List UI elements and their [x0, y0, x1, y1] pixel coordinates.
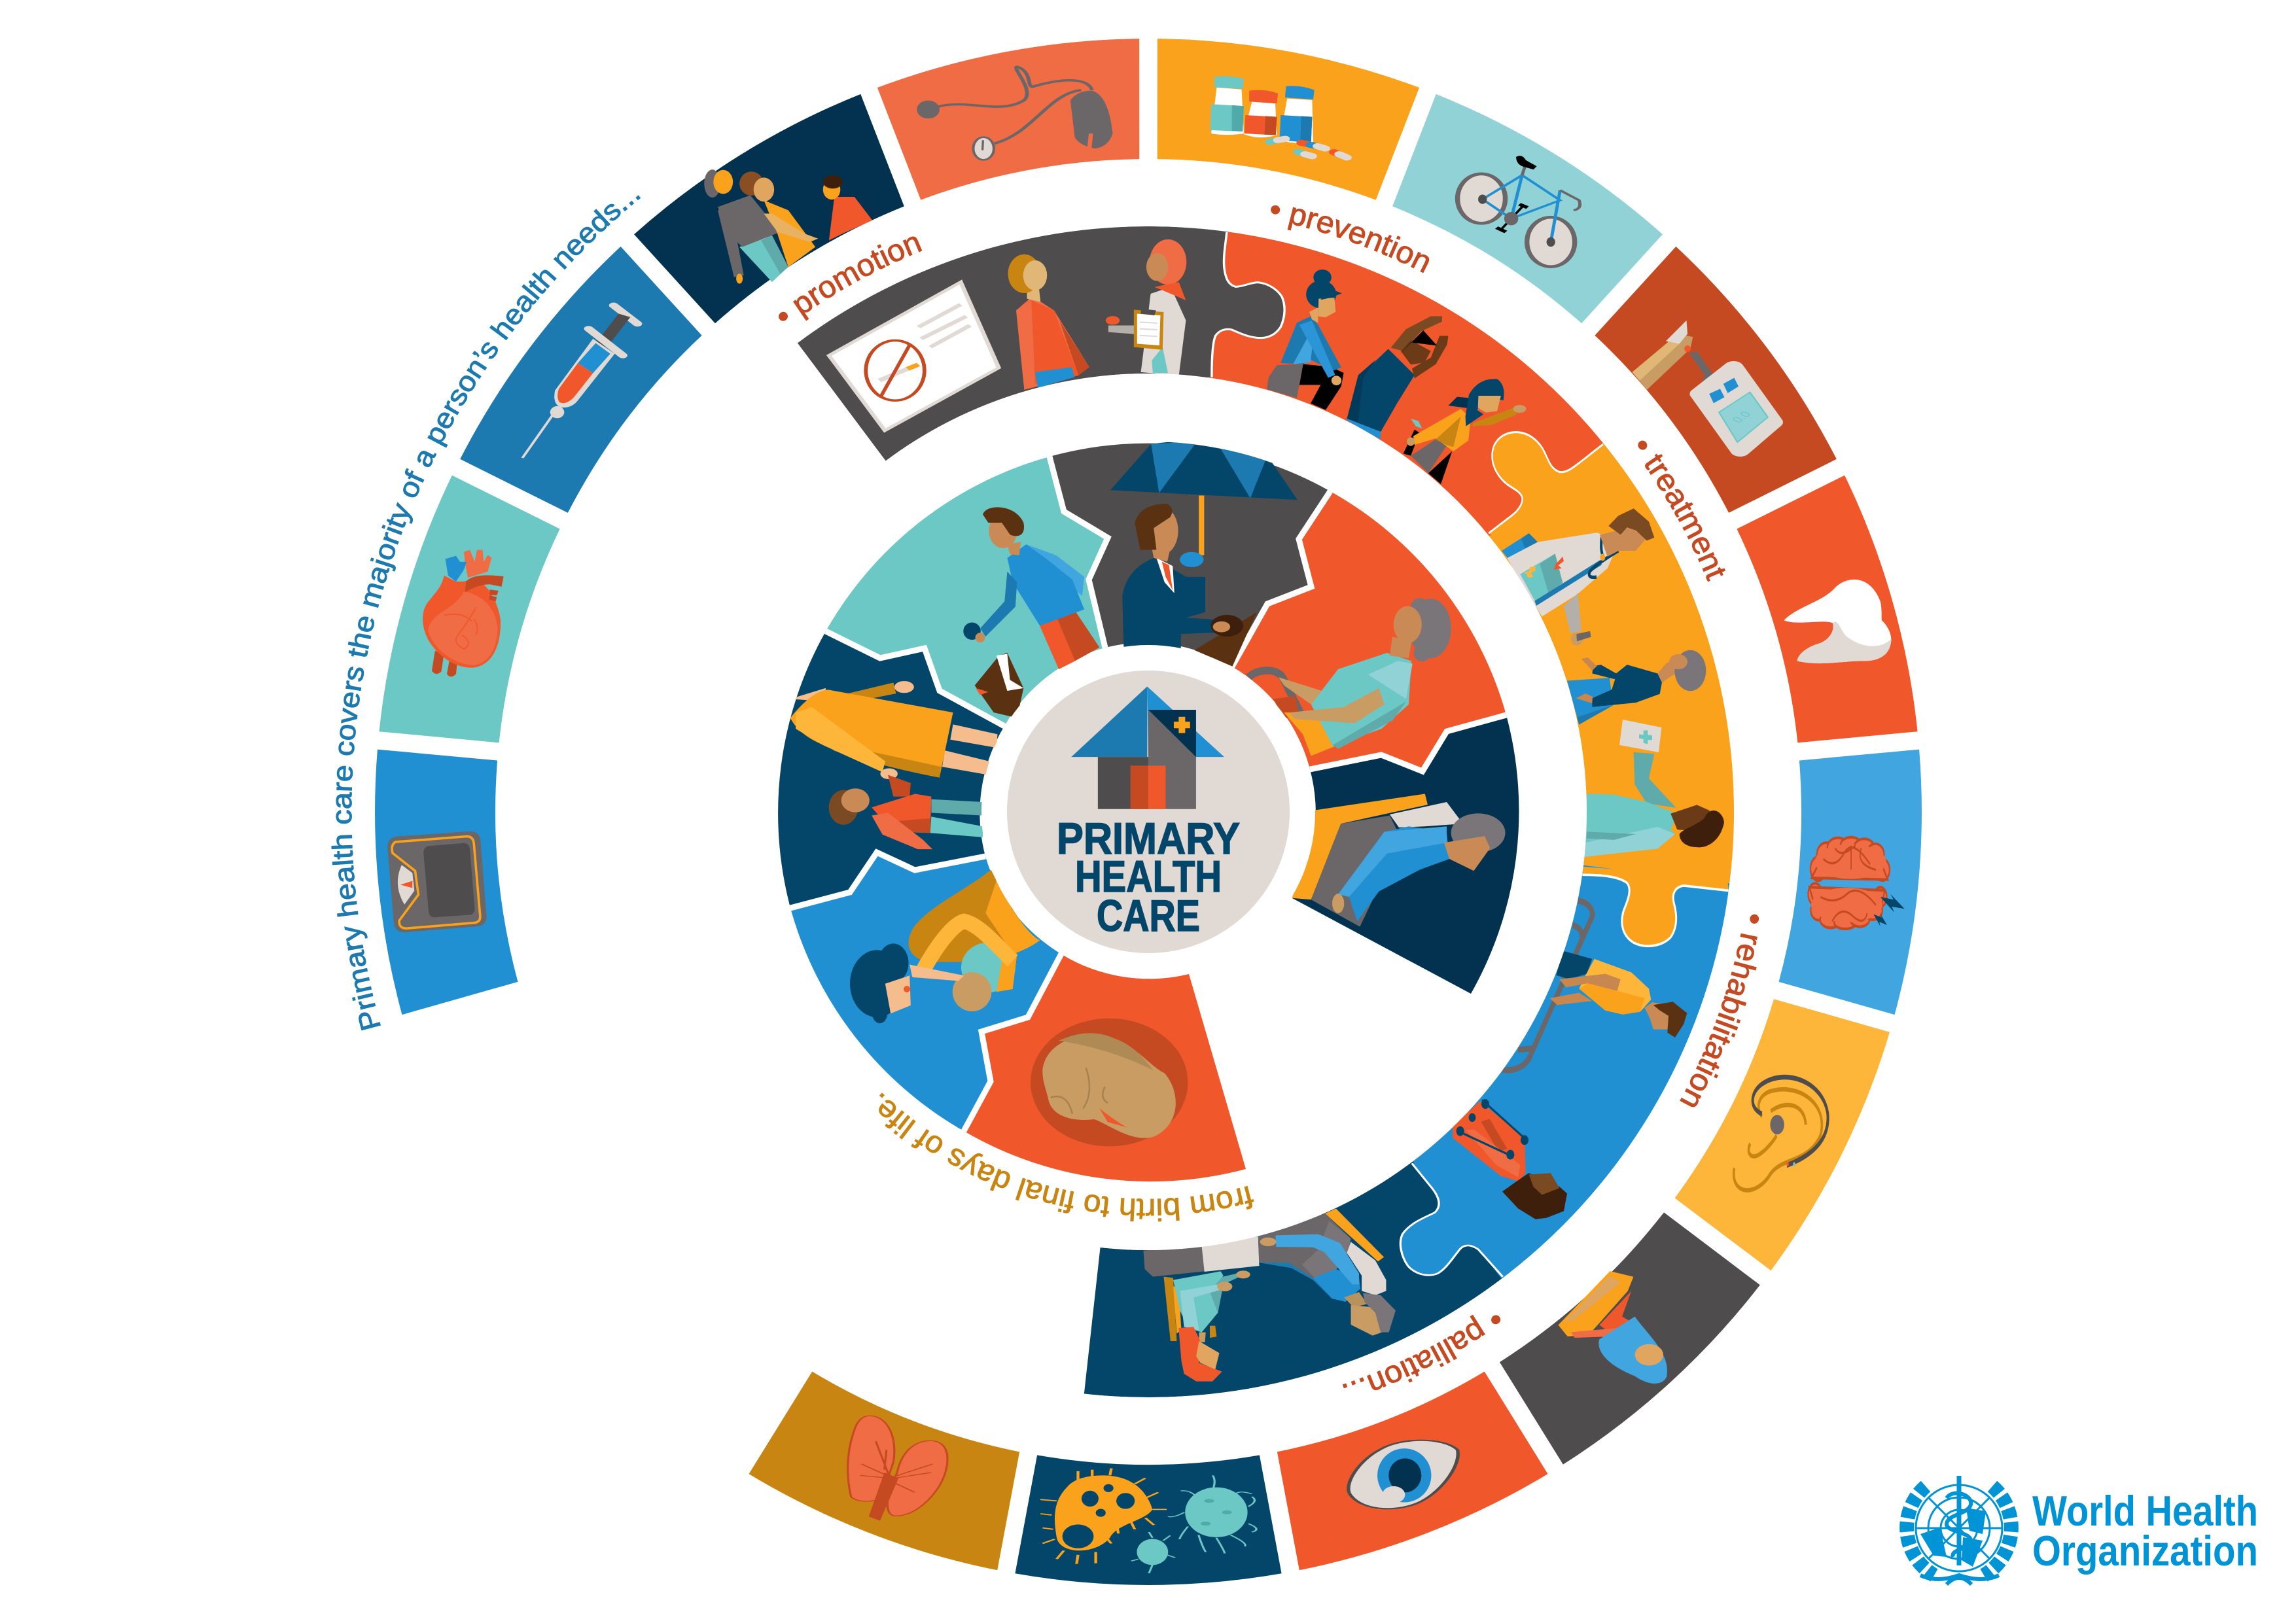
tile: ear with hearing aid	[1665, 979, 1900, 1276]
puzzle piece: rehabilitation	[1413, 865, 1730, 1279]
label: rehabilitation: • rehabilitation	[1680, 915, 1759, 1107]
tile: bicycle	[1374, 84, 1669, 335]
figure: mother with child	[790, 681, 997, 849]
figure: elder in chair	[1292, 794, 1506, 927]
tile: sphygmomanometer	[875, 27, 1161, 204]
figure: businessman under umbrella	[1110, 438, 1298, 667]
figures in the inner ring	[790, 438, 1506, 1146]
tile: person with yoga mat	[1483, 1198, 1768, 1473]
life stage: fetus	[964, 954, 1246, 1181]
tile: kidneys	[745, 1363, 1040, 1581]
label: palliation: • palliation...	[1343, 1315, 1501, 1391]
life stage: elder with walker	[1232, 491, 1506, 771]
figures: rehabilitation walker user and helper	[1453, 901, 1687, 1219]
icon: house logo	[1071, 686, 1224, 809]
puzzle piece: palliation	[1084, 1155, 1511, 1397]
tile: eye	[1256, 1363, 1552, 1581]
tile: family of people	[628, 84, 923, 335]
label: treatment: • treatment	[1638, 441, 1725, 582]
life stage: mother and baby	[790, 852, 1061, 1131]
heading	[1057, 814, 1240, 941]
figure: fetus	[1031, 1019, 1188, 1146]
label: prevention: • prevention	[1271, 205, 1429, 273]
life stage: working adult	[1050, 444, 1330, 667]
WHO logo	[1907, 1476, 2258, 1584]
puzzle joints	[1201, 232, 1729, 1277]
middle ring of service puzzle pieces	[798, 97, 1863, 1526]
life stage: mother and child	[778, 631, 1004, 908]
figure: youth and dog	[963, 507, 1099, 718]
label: promotion: • promotion	[779, 237, 923, 321]
figure: man stretching	[1346, 316, 1449, 440]
puzzle piece: promotion	[798, 226, 1227, 461]
life stage: elder in chair	[1292, 715, 1519, 994]
icon: WHO emblem	[1907, 1476, 2011, 1584]
figure: woman in hijab walking	[1404, 379, 1527, 484]
text: World Health Organization	[2032, 1487, 2258, 1575]
tile: heart	[368, 472, 566, 764]
tile: bacteria and viruses	[1015, 1455, 1282, 1585]
caption: from birth to final days of life: from birth to final days of life.	[879, 1092, 1254, 1222]
puzzle piece: prevention	[1208, 232, 1612, 544]
tile: glucose meter	[1581, 239, 1846, 531]
outer ring of health condition tiles	[366, 27, 1931, 1585]
figures: palliation caregiver and elder	[1143, 1208, 1396, 1382]
figure: woman exercising	[1267, 270, 1344, 410]
centre emblem: primary health care	[1007, 671, 1290, 953]
white hub ring	[981, 645, 1315, 979]
tile: brain	[1776, 739, 1931, 1016]
white gap between rings	[710, 374, 1587, 1250]
text: World Health Organization: Organization	[2032, 1527, 2258, 1575]
tile: weighing scale	[366, 739, 520, 1016]
text: World Health Organization: World Health	[2032, 1487, 2258, 1535]
figure: mother and baby	[850, 870, 1040, 1023]
tile: tooth	[1731, 472, 1929, 764]
heading: CARE	[1097, 891, 1200, 941]
figure: elder with walker	[1248, 598, 1451, 756]
heading: PRIMARY	[1057, 814, 1240, 864]
puzzle piece: treatment	[1489, 444, 1734, 883]
life stage: youth with dog	[826, 457, 1108, 726]
tile: syringe	[451, 239, 715, 531]
caption: outer ring: Primary health care covers the majority of a person’s health needs...	[331, 195, 641, 1031]
tile: glucose meter: 0.0	[1729, 410, 1754, 425]
heading: HEALTH	[1075, 852, 1222, 901]
inner ring of life stages	[778, 438, 1519, 1181]
tile: medicine bottles	[1136, 27, 1421, 204]
figures: treatment doctor, patient and nurse	[1502, 508, 1724, 857]
